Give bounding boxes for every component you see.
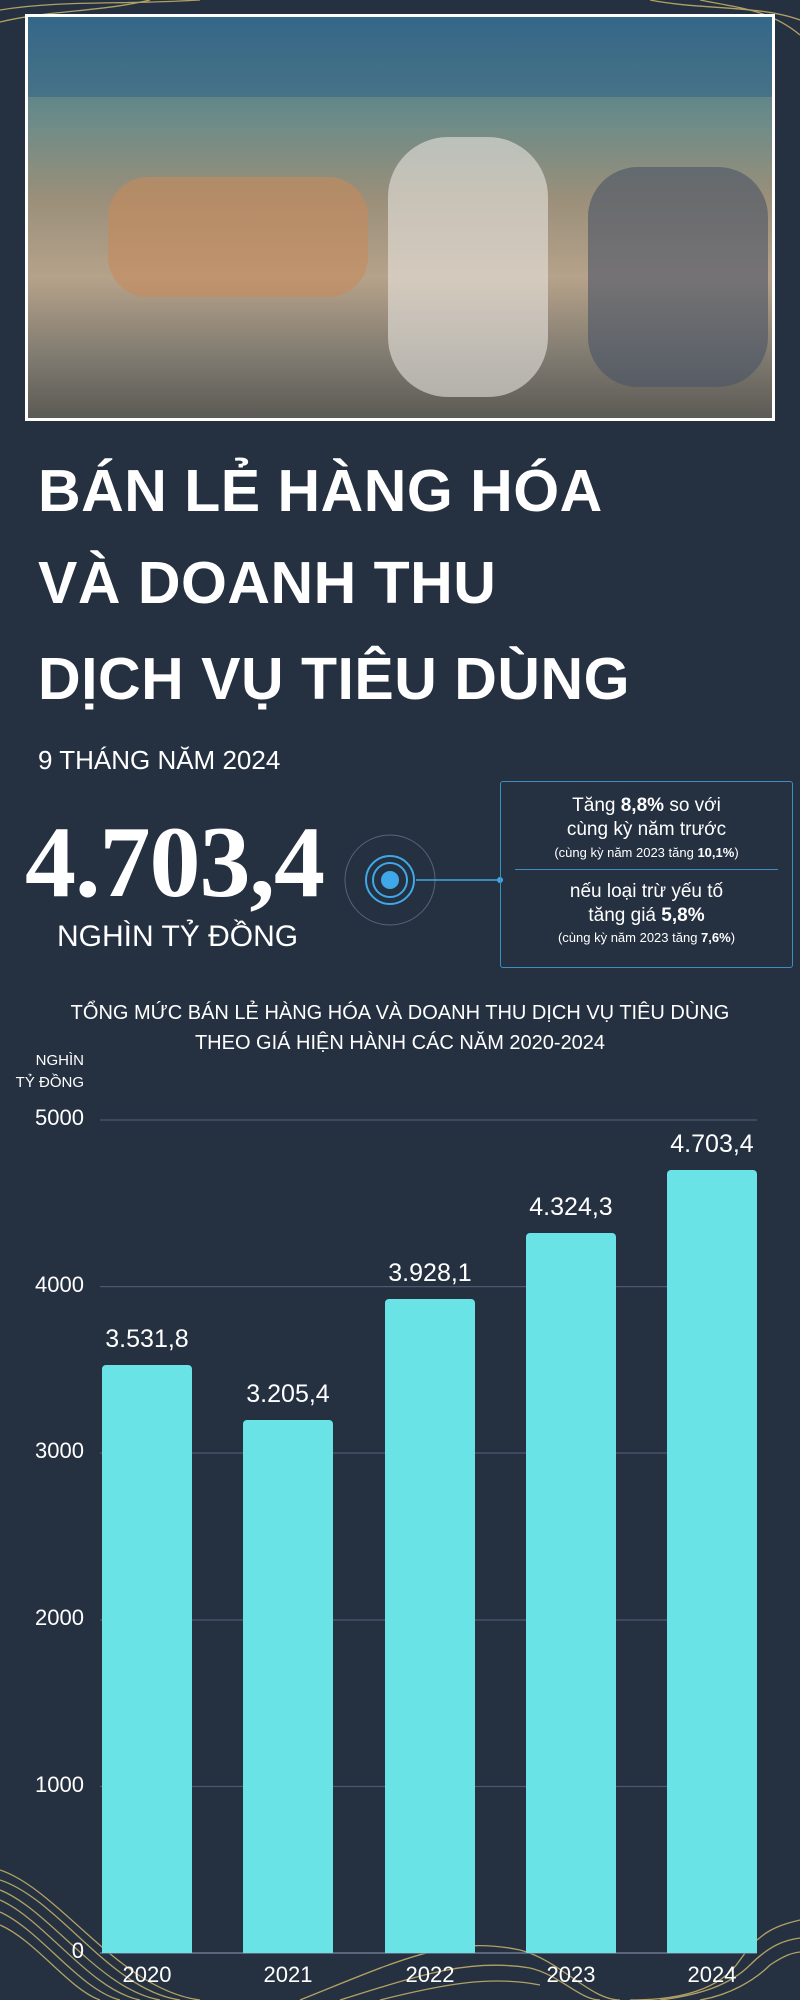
bar chart: 3.531,8 <box>105 1325 189 1353</box>
bar chart: NGHÌN <box>36 1052 84 1069</box>
title: BÁN LẺ HÀNG HÓA <box>38 458 603 524</box>
callout box: cùng kỳ năm trước <box>567 819 726 840</box>
callout box: (cùng kỳ năm 2023 tăng 7,6%) <box>558 930 735 945</box>
bar chart: 0 <box>72 1938 84 1963</box>
title: VÀ DOANH THU <box>38 550 496 616</box>
callout box: tăng giá 5,8% <box>588 904 705 926</box>
bar chart: 5000 <box>35 1105 84 1130</box>
bar chart: 3.928,1 <box>388 1259 472 1287</box>
x axis labels: 2020 <box>123 1962 171 1987</box>
x axis labels: 2022 <box>406 1962 454 1987</box>
x axis labels: 2021 <box>264 1962 312 1987</box>
big number: 4.703,4 <box>25 806 324 919</box>
callout box: Tăng 8,8% so với <box>572 795 721 816</box>
callout box <box>500 781 793 968</box>
x axis labels: 2023 <box>547 1962 595 1987</box>
photo: supermarket <box>25 14 775 421</box>
callout box: nếu loại trừ yếu tố <box>570 881 723 902</box>
icon: target circles with connector <box>344 834 503 926</box>
bar chart: TỶ ĐỒNG <box>16 1074 84 1091</box>
bar chart: 4000 <box>35 1272 84 1297</box>
bar chart <box>16 1052 757 1963</box>
title: DỊCH VỤ TIÊU DÙNG <box>38 646 630 712</box>
bar chart: 3.205,4 <box>246 1380 330 1408</box>
bar chart: 2000 <box>35 1605 84 1630</box>
bar chart: 3000 <box>35 1438 84 1463</box>
title <box>38 458 630 712</box>
chart title: TỔNG MỨC BÁN LẺ HÀNG HÓA VÀ DOANH THU DỊCH VỤ TIÊU DÙNG <box>71 1002 729 1024</box>
big number: NGHÌN TỶ ĐỒNG <box>57 920 298 953</box>
chart title <box>71 1000 729 1054</box>
bar chart: 4.703,4 <box>670 1130 754 1158</box>
x axis labels: 2024 <box>688 1962 736 1987</box>
subtitle: 9 THÁNG NĂM 2024 <box>38 745 280 775</box>
bar chart: 4.324,3 <box>529 1193 613 1221</box>
bar chart: 1000 <box>35 1772 84 1797</box>
callout box: (cùng kỳ năm 2023 tăng 10,1%) <box>554 844 739 860</box>
chart title: THEO GIÁ HIỆN HÀNH CÁC NĂM 2020-2024 <box>195 1032 605 1054</box>
x axis labels <box>123 1962 736 1987</box>
